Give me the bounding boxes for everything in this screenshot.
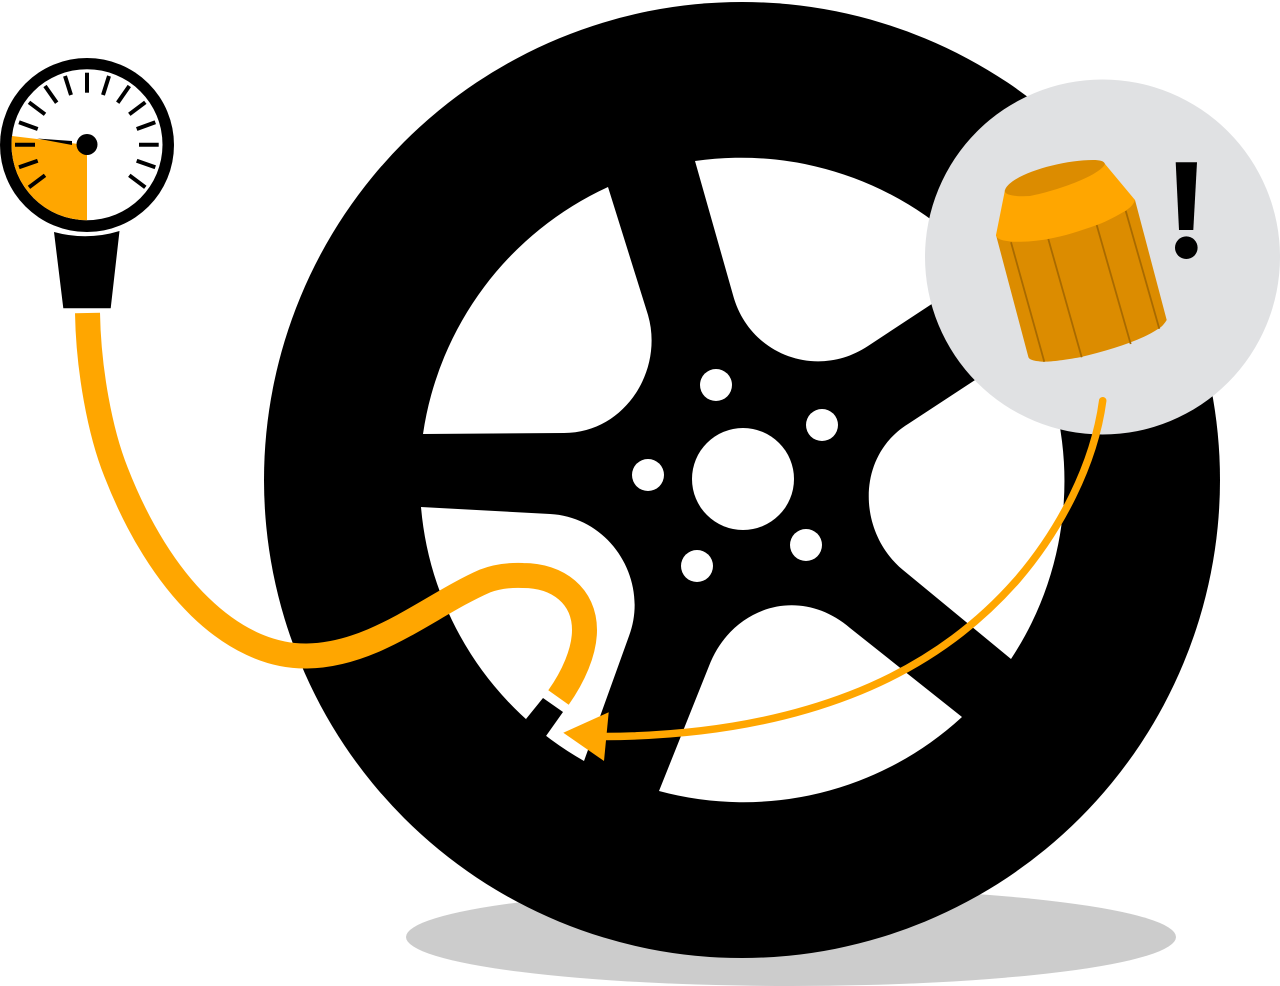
- gauge dial: [0, 58, 174, 232]
- air hose: [88, 313, 584, 698]
- lug holes: [632, 369, 838, 582]
- gauge ticks: [15, 73, 159, 187]
- tire and wheel: [264, 2, 1220, 958]
- curved arrow: [563, 401, 1103, 761]
- wheel window: top: [695, 158, 985, 361]
- exclamation mark: [1175, 162, 1198, 259]
- valve stem: [526, 698, 563, 736]
- gauge needle: [37, 138, 72, 145]
- center hub: [692, 428, 794, 530]
- wheel window: top left: [423, 187, 652, 434]
- callout circle: [925, 80, 1280, 434]
- wheel window: bottom: [659, 605, 962, 802]
- wheel window: bottom left: [421, 507, 635, 761]
- ground shadow: [406, 888, 1176, 986]
- valve cap icon: [996, 160, 1167, 362]
- gauge low zone: [11, 136, 87, 220]
- wheel window: right: [869, 342, 1064, 659]
- gauge body: [54, 231, 120, 308]
- gauge: [0, 58, 174, 308]
